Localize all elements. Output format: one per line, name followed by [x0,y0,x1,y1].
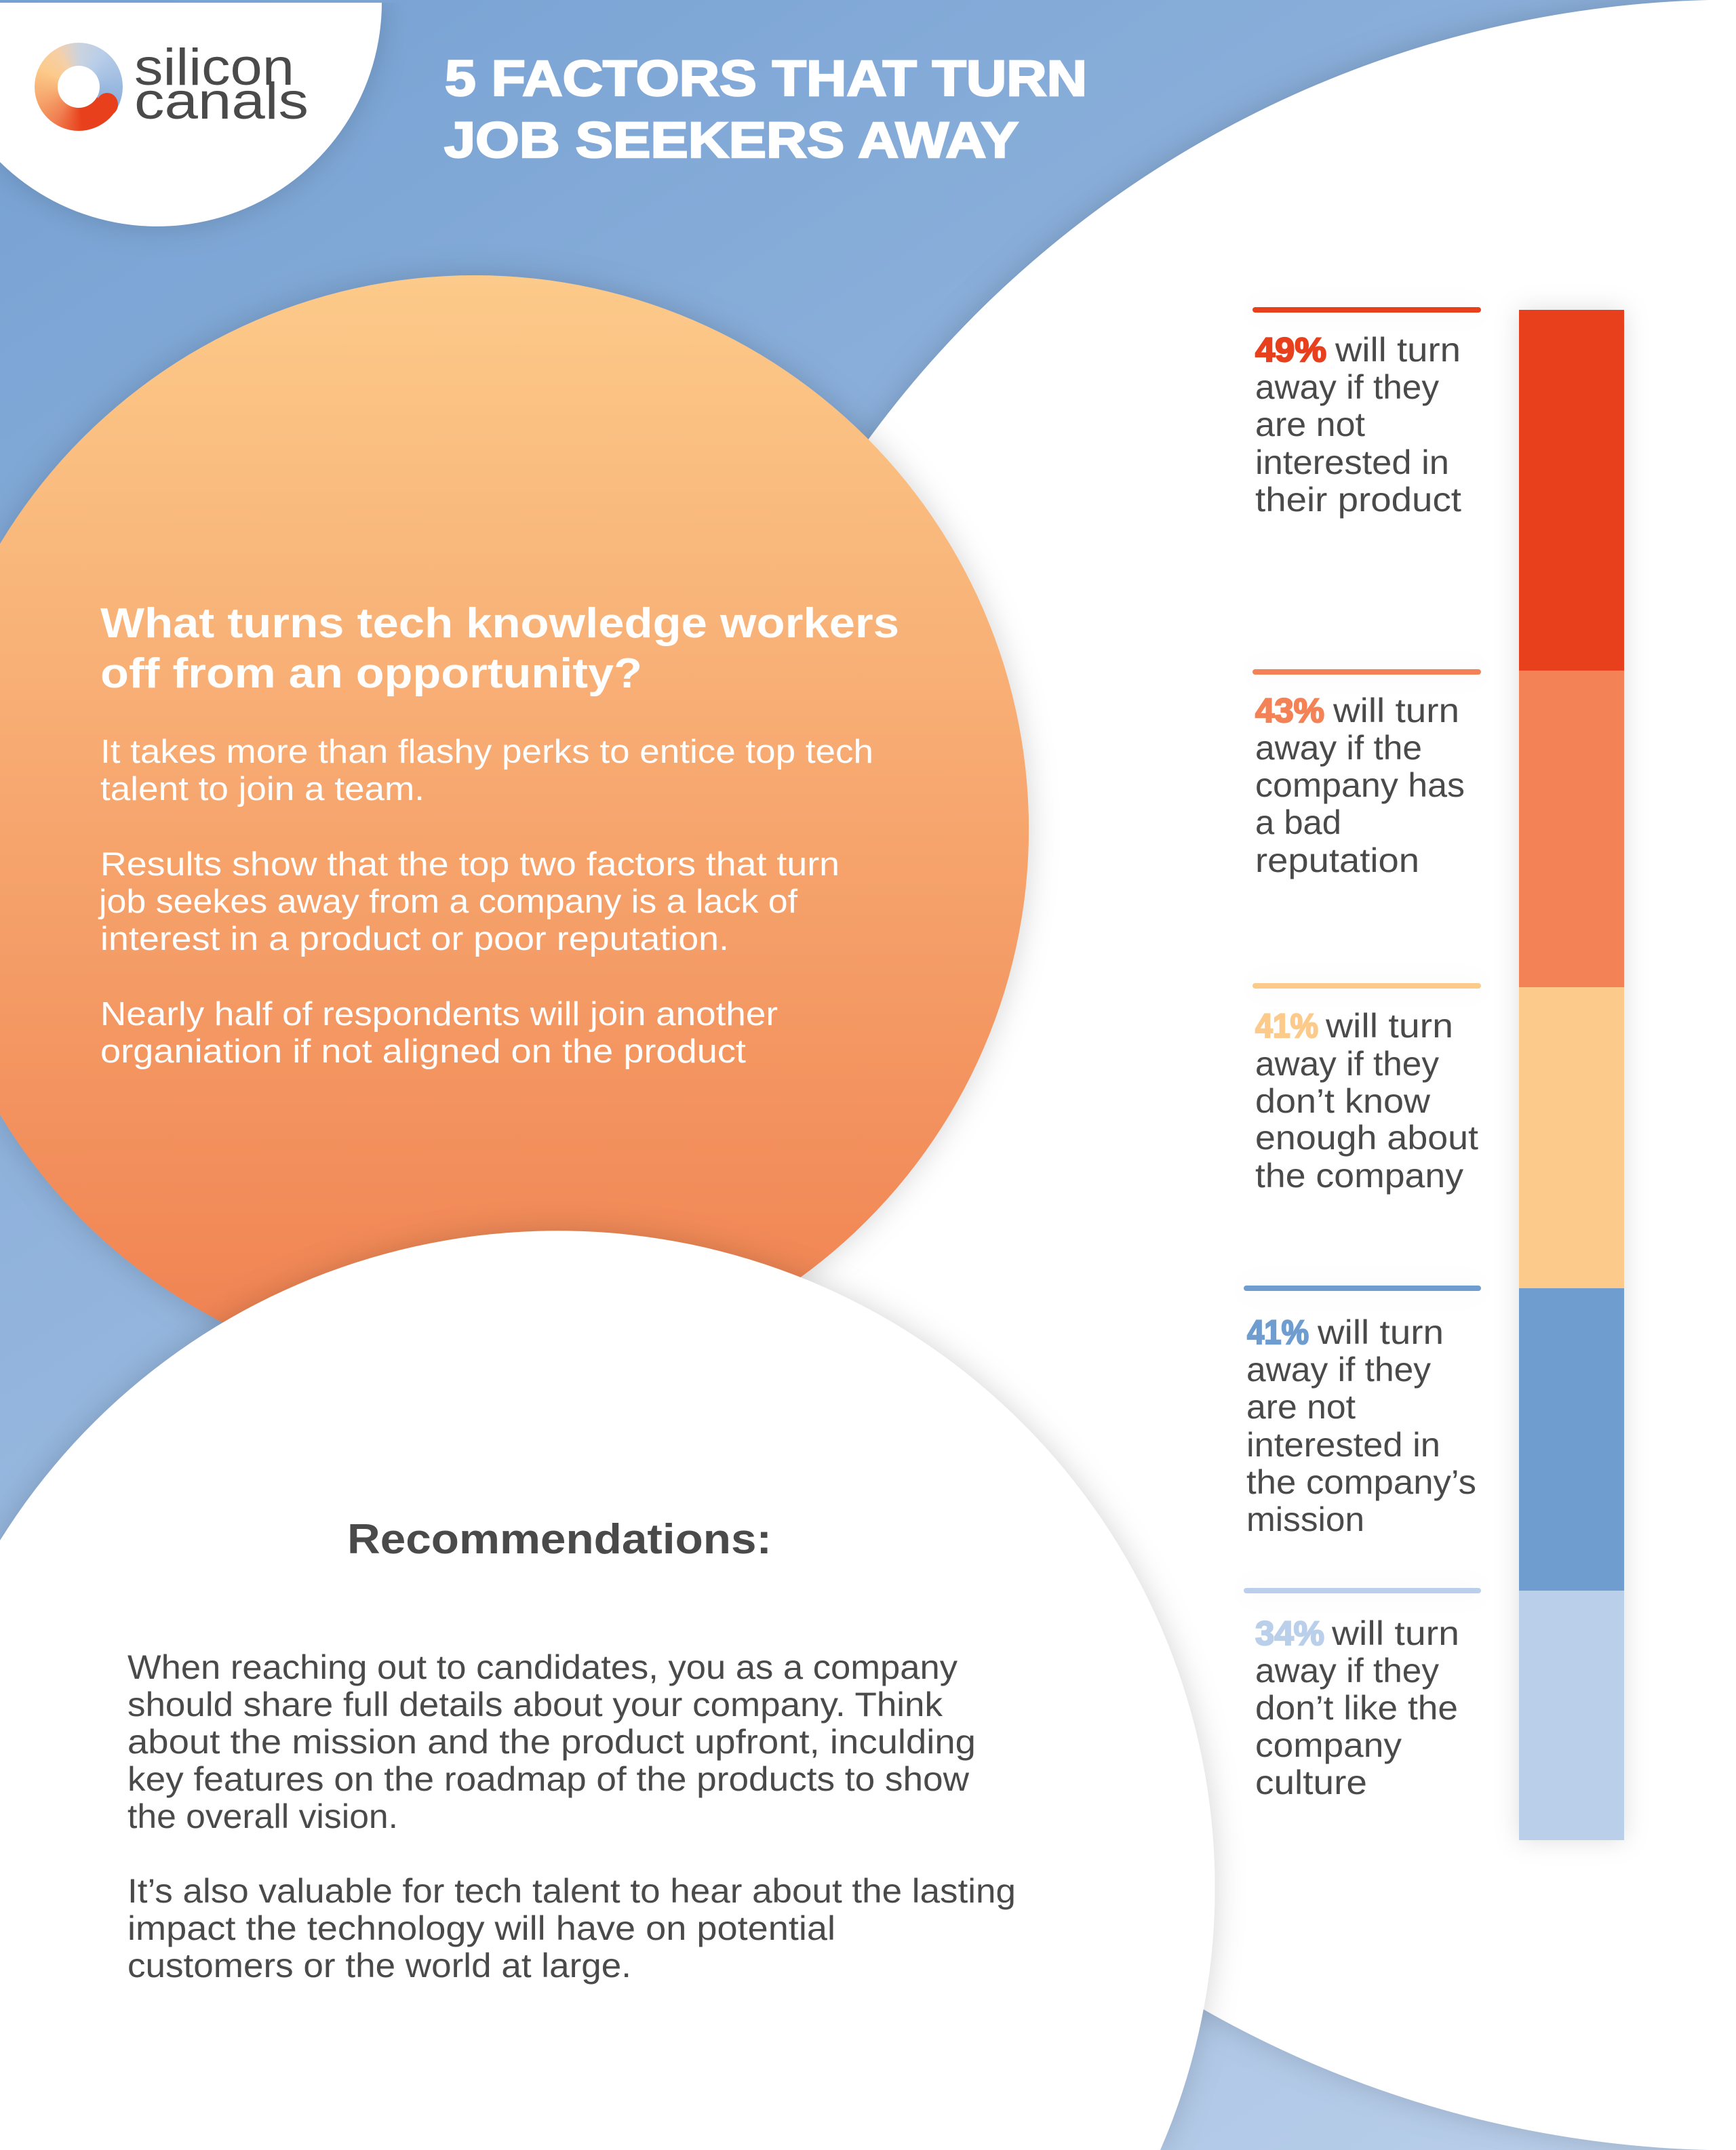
recommendations paragraphs: customers or the world at large. [127,1947,631,1985]
recommendations paragraphs: the overall vision. [127,1797,398,1835]
callout: 34% culture: company [1255,1726,1402,1764]
orange panel paragraphs [98,734,873,1070]
orange heading: off from an opportunity? [100,650,642,697]
callout: 41% mission: the company’s [1246,1463,1476,1501]
callout: 41% don't know enough: will turn [1325,1007,1453,1045]
callout: 43% reputation: will turn [1333,692,1459,730]
callout: 34% culture: 34% [1255,1614,1324,1652]
callout: 43% reputation: 43% [1255,692,1324,730]
callout: 41% don't know enough: away if they [1255,1045,1439,1083]
callout: 41% mission: interested in [1246,1426,1440,1464]
orange panel paragraphs: It takes more than flashy perks to entice top tech [100,734,873,770]
callout: 41% mission: will turn [1317,1313,1444,1351]
callout: 49% product: their product [1255,481,1461,519]
logo wordmark: canals [134,73,309,130]
callout: 49% product: are not [1255,405,1365,443]
title: 5 FACTORS THAT TURN [445,50,1087,106]
orange panel paragraphs: organiation if not aligned on the product [100,1033,746,1070]
callout: 43% reputation: company has [1255,766,1465,804]
recommendations paragraphs: key features on the roadmap of the products to show [127,1760,970,1798]
callout: 34% culture: culture [1255,1764,1367,1801]
callout: 49% product: away if they [1255,368,1439,406]
title [444,50,1087,168]
orange panel paragraphs: talent to join a team. [100,771,425,808]
callout: 41% mission: 41% [1247,1313,1309,1351]
recommendations heading: Recommendations: [347,1516,772,1563]
callout: 41% mission [1244,1286,1481,1538]
orange heading: What turns tech knowledge workers [100,600,899,647]
callout: 41% mission: mission [1246,1500,1364,1538]
stacked bar chart [1519,310,1624,1840]
callout: 49% product [1252,307,1481,519]
bar segment: 34% [1519,1591,1624,1840]
panel: recommendations circle [0,1231,1215,2150]
callout: 41% don't know enough: don’t know [1255,1082,1431,1120]
callout: 41% don't know enough: enough about [1255,1119,1478,1157]
callout: 41% mission: away if they [1246,1351,1431,1389]
callout: 34% culture: will turn [1331,1614,1459,1652]
logo panel [0,0,382,226]
recommendations paragraphs: about the mission and the product upfront, inculding [127,1723,976,1761]
recommendations paragraphs: impact the technology will have on potential [127,1909,835,1947]
recommendations paragraphs: When reaching out to candidates, you as a company [127,1648,958,1686]
callout: 49% product: interested in [1255,443,1449,481]
bar segment: 41% mission [1519,1288,1624,1591]
callout: 49% product: will turn [1335,331,1461,369]
callout: 43% reputation: away if the [1255,729,1422,767]
bar segment: 49% [1519,310,1624,671]
callout: 43% reputation: reputation [1255,841,1419,879]
callout: 43% reputation [1252,669,1481,879]
recommendations paragraphs: should share full details about your company. Think [127,1686,943,1724]
logo wordmark [134,39,309,130]
panel: orange circle [0,275,1029,1383]
callout: 41% don't know enough: the company [1255,1157,1463,1195]
recommendations paragraphs: It’s also valuable for tech talent to hear about the lasting [127,1872,1016,1910]
title: JOB SEEKERS AWAY [444,112,1019,168]
callout: 34% culture: away if they [1255,1652,1439,1690]
callout: 41% don't know enough: 41% [1255,1007,1318,1045]
icon: logo ring [35,43,123,131]
orange heading [100,600,899,697]
callout: 34% culture [1244,1588,1481,1801]
bar segment: 43% [1519,671,1624,987]
callout: 34% culture: don’t like the [1255,1689,1458,1727]
recommendations paragraphs [127,1648,1016,1985]
orange panel paragraphs: interest in a product or poor reputation. [100,921,729,957]
orange panel paragraphs: job seekes away from a company is a lack of [98,883,797,920]
orange panel paragraphs: Nearly half of respondents will join another [100,996,778,1033]
callout: 49% product: 49% [1255,331,1326,369]
logo wordmark: silicon [134,39,294,96]
callout: 41% mission: are not [1246,1388,1356,1426]
callout: 41% don't know enough [1252,983,1481,1195]
callout: 43% reputation: a bad [1255,803,1341,841]
orange panel paragraphs: Results show that the top two factors that turn [100,846,840,883]
large white circle [660,0,1736,2150]
bar segment: 41% know [1519,987,1624,1288]
